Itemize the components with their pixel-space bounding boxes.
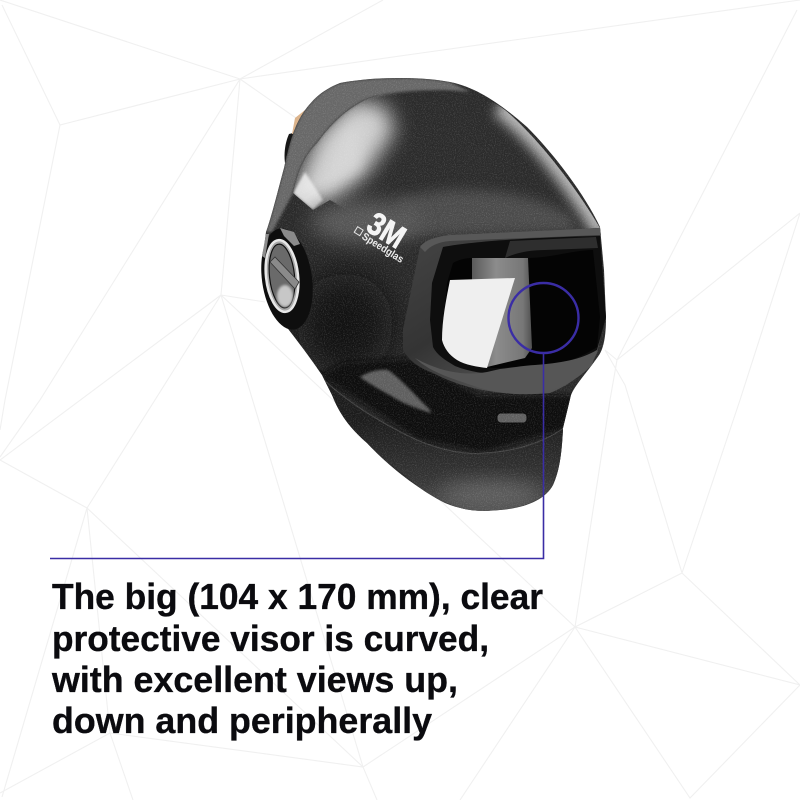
caption text: protective visor is curved, [52, 618, 489, 659]
visor lens [442, 250, 600, 368]
rear adjustment knob [285, 132, 298, 172]
lens reflection [472, 258, 532, 367]
helmet photo illustration [255, 70, 615, 520]
highlight circle on visor [508, 283, 578, 353]
caption text: with excellent views up, [51, 659, 458, 700]
Speedglas wordmark [352, 226, 406, 266]
side dial [255, 225, 319, 333]
caption text: The big (104 x 170 mm), clear [52, 576, 543, 617]
visor frame [403, 228, 605, 394]
chin button [498, 414, 526, 422]
helmet shell [255, 70, 615, 520]
visor inner surround [430, 236, 606, 374]
leader line [50, 353, 544, 558]
orange headband strip [292, 110, 305, 134]
white lens panel [442, 278, 515, 368]
3M logo: 3M [361, 205, 412, 255]
lower frame lip [415, 350, 597, 394]
callout: circle and leader line [50, 283, 578, 558]
Speedglas wordmark: Speedglas [359, 231, 406, 266]
caption text [51, 576, 543, 741]
caption text: down and peripherally [52, 700, 432, 741]
chin highlight [360, 370, 431, 413]
